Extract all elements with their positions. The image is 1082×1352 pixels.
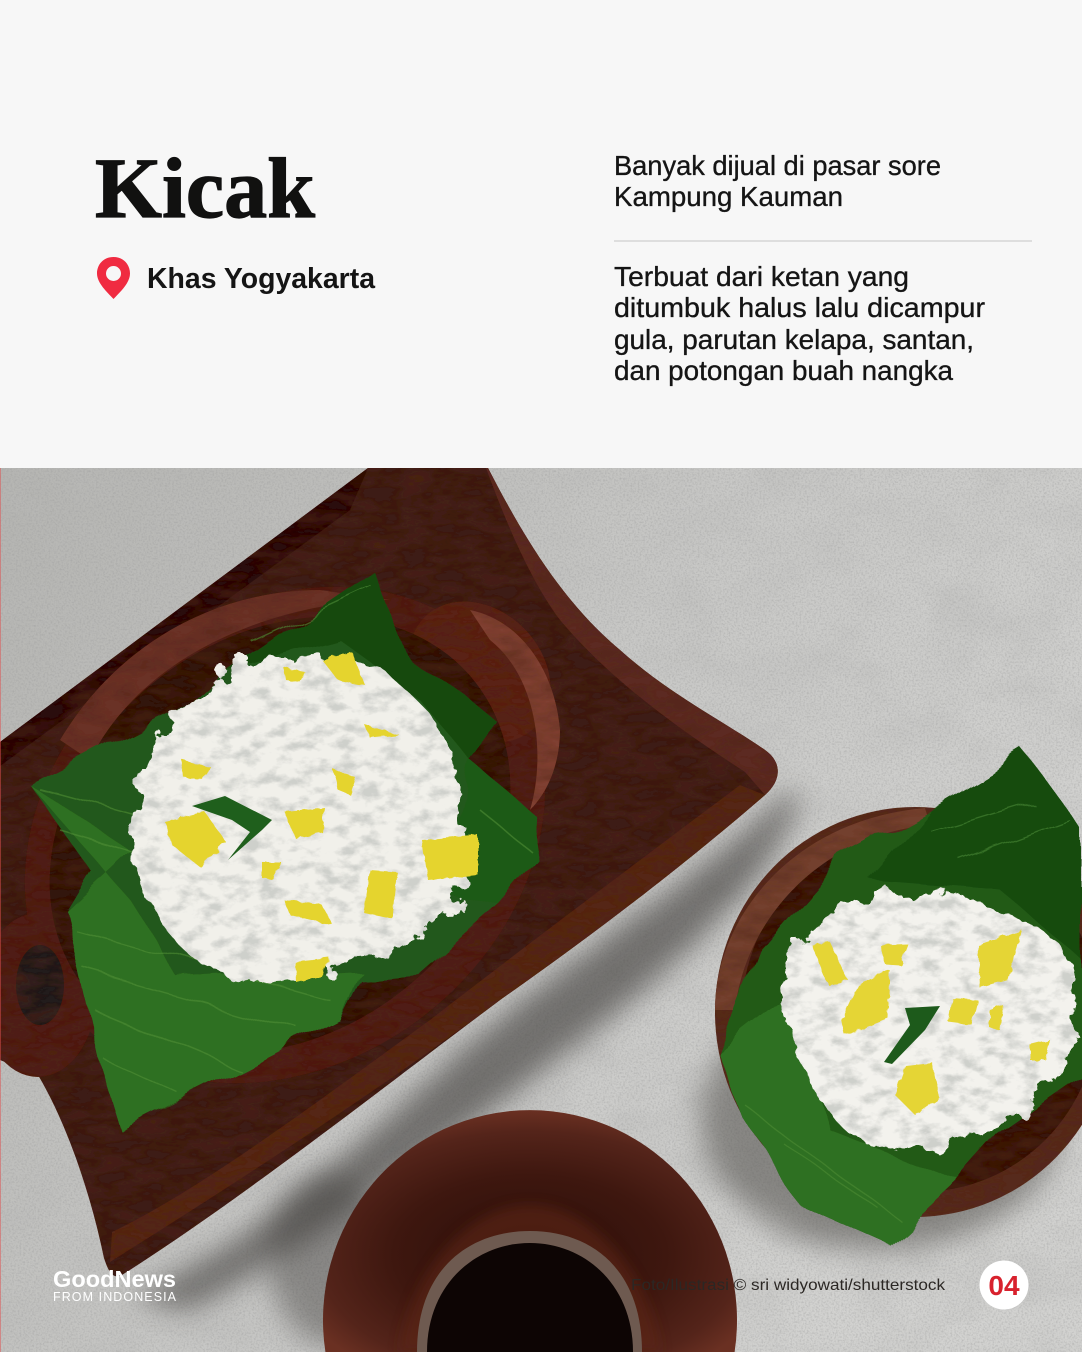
subtitle: region: Khas Yogyakarta bbox=[147, 263, 376, 295]
text block: where sold bbox=[614, 150, 941, 212]
pandan sliver, right bbox=[884, 1006, 940, 1064]
logo: GoodNews from Indonesia: GoodNews bbox=[53, 1266, 176, 1292]
cup inner rim bbox=[417, 1231, 642, 1352]
text block: description: gula, parutan kelapa, santan, bbox=[614, 324, 974, 355]
text block: description bbox=[614, 261, 985, 386]
banana leaf, large bbox=[30, 570, 538, 1132]
icon: location pin bbox=[97, 257, 130, 299]
text block: where sold: Banyak dijual di pasar sore bbox=[614, 150, 941, 181]
text block: description: dan potongan buah nangka bbox=[614, 355, 953, 386]
photo credit: Foto/Ilustrasi © sri widyowati/shutterstock bbox=[631, 1277, 946, 1294]
text block: description: Terbuat dari ketan yang bbox=[614, 261, 909, 292]
logo: GoodNews from Indonesia: FROM INDONESIA bbox=[53, 1290, 177, 1304]
clay cup bbox=[323, 1110, 737, 1352]
cup shadow bbox=[270, 1175, 390, 1345]
tray shadow bbox=[130, 790, 800, 1310]
title: Kicak bbox=[95, 140, 315, 236]
text block: description: ditumbuk halus lalu dicampur bbox=[614, 292, 985, 323]
pandan sliver, large bbox=[192, 796, 272, 860]
banana leaf, right bbox=[720, 752, 1082, 1245]
text block: where sold: Kampung Kauman bbox=[614, 181, 843, 212]
clay tray bbox=[0, 468, 778, 1276]
rice mound, right bbox=[783, 893, 1076, 1149]
page number badge: 04 bbox=[988, 1270, 1020, 1301]
jackfruit pieces, right bbox=[812, 930, 1050, 1115]
jackfruit pieces, large bbox=[165, 652, 478, 982]
clay plate, right bbox=[715, 807, 1082, 1217]
clay bowl with handles bbox=[0, 586, 560, 1083]
photo: kicak on banana leaves bbox=[0, 468, 1082, 1352]
right plate shadow bbox=[700, 990, 1060, 1250]
rice mound, large bbox=[132, 659, 465, 982]
page number badge bbox=[980, 1260, 1028, 1310]
cup dark liquid bbox=[427, 1243, 633, 1352]
logo: GoodNews from Indonesia bbox=[53, 1266, 177, 1304]
